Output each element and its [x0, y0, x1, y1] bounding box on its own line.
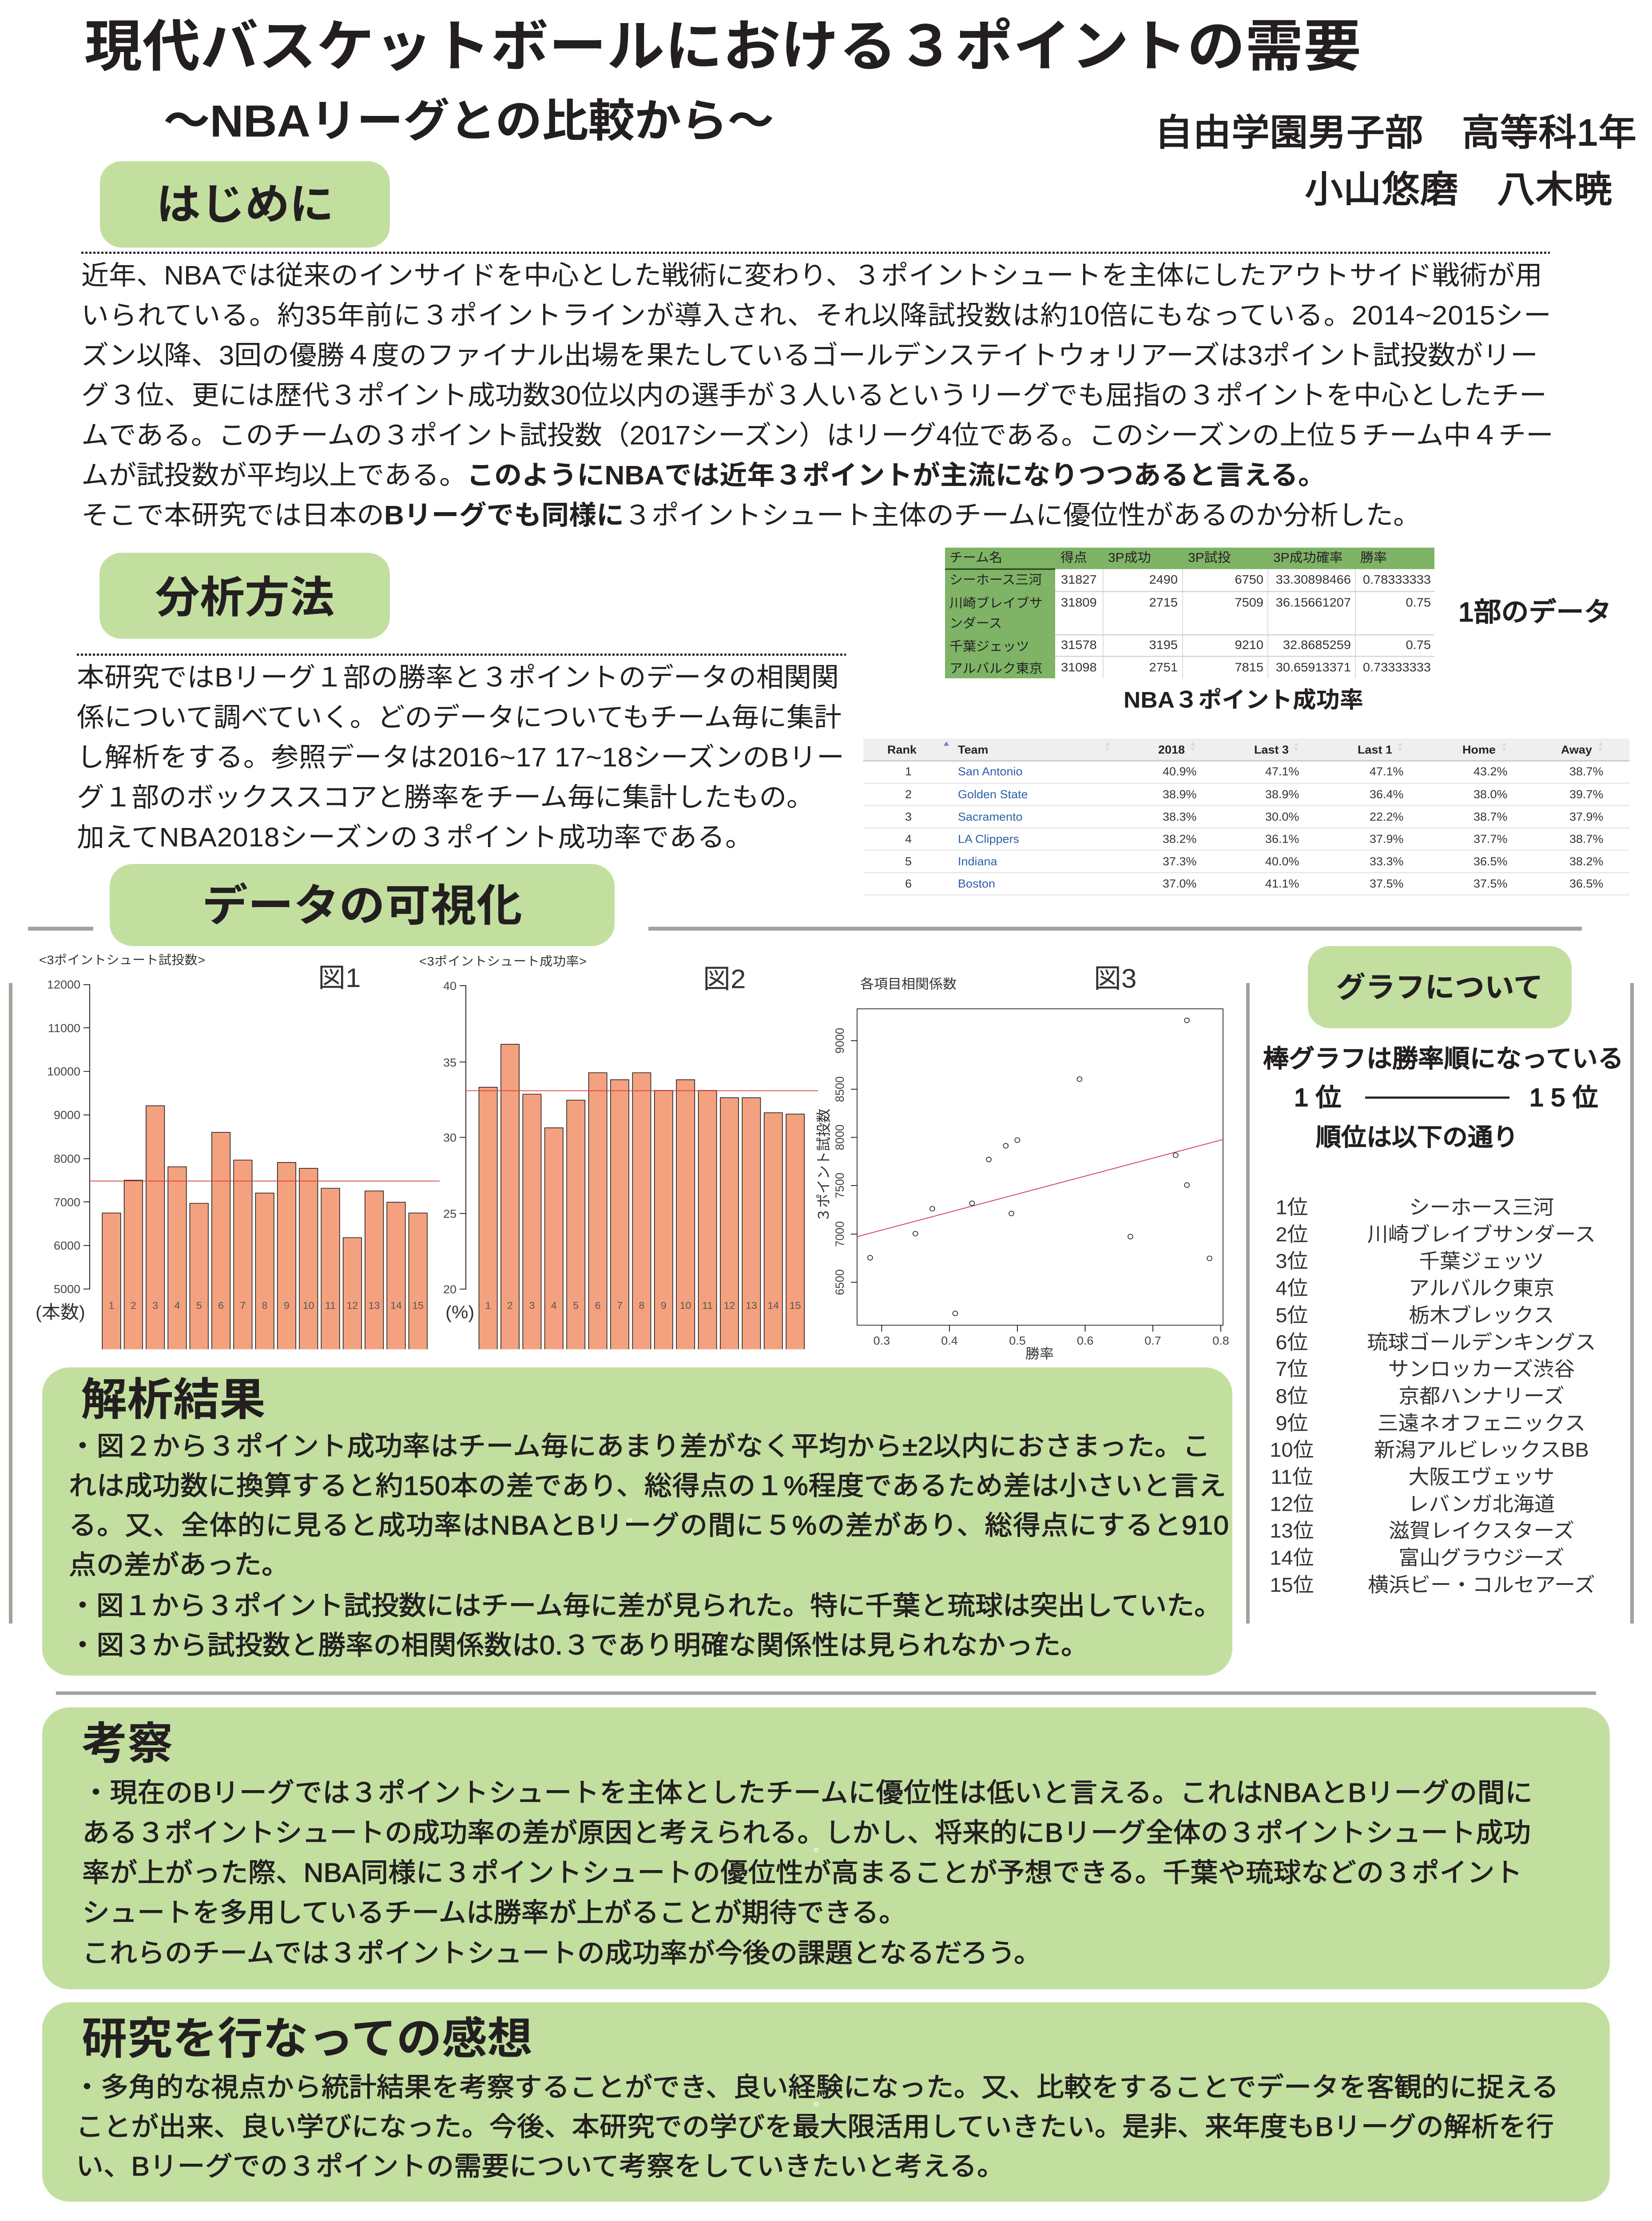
chart: figure 1 bar chart of 3-point attempts: 11 — [325, 1300, 336, 1311]
text block: reflections body: ことが出来、良い学びになった。今後、本研究での学びを最大限活用していきたい。是非、来年度もBリーグの解析を行 — [76, 2112, 1554, 2141]
text block: bar chart order note: 棒グラフは勝率順になっている — [1263, 1045, 1624, 1073]
text block: reflections body: ・多角的な視点から統計結果を考察することができ、良い経験になった。又、比較をすることでデータを客観的に捉える — [73, 2072, 1559, 2102]
text block: discussion body: シュートを多用しているチームは勝率が上がることが期待できる。 — [82, 1898, 906, 1927]
chart: figure 2 bar chart of 3-point percentage: 13 — [746, 1300, 757, 1311]
table: league division 1 data: チーム名 — [949, 550, 1002, 565]
chart: figure 2 bar chart of 3-point percentage: 7 — [617, 1300, 623, 1311]
panel: analysis method — [77, 553, 846, 852]
chart: figure 2 bar chart of 3-point percentage: (%) — [445, 1302, 474, 1322]
heading: reflections: 研究を行なっての感想 — [82, 2014, 532, 2063]
table: NBA 3-point percentage: 37.7% — [1473, 832, 1508, 846]
list: team ranking: 4位 — [1275, 1277, 1308, 1299]
table: league division 1 data: 7509 — [1235, 596, 1263, 609]
chart: figure 2 bar chart of 3-point percentage: 40 — [443, 979, 457, 992]
chart: figure 1 bar chart of 3-point attempts: 14 — [390, 1300, 402, 1311]
chart: figure 3 scatter plot of attempts against win rate: 0.8 — [1212, 1334, 1229, 1347]
table: NBA 3-point percentage: 36.5% — [1569, 877, 1604, 890]
heading: analysis results: 解析結果 — [81, 1374, 266, 1425]
chart: figure 1 bar chart of 3-point attempts: 5000 — [54, 1282, 80, 1296]
table: NBA 3-point percentage: 37.0% — [1163, 877, 1197, 890]
table: NBA 3-point percentage: 2018 — [1158, 743, 1185, 756]
table: NBA 3-point percentage: 41.1% — [1265, 877, 1299, 890]
chart: figure 3 scatter plot of attempts against win rate: 各項目相関係数 — [860, 977, 957, 992]
text block: reflections body — [73, 2072, 1559, 2181]
chart: figure 3 scatter plot of attempts against win rate: 6500 — [833, 1270, 846, 1295]
chart: figure 2 bar chart of 3-point percentage: 25 — [443, 1207, 457, 1220]
chart: figure 2 bar chart of 3-point percentage: <3ポイントシュート成功率> — [419, 955, 587, 968]
text block: bar chart order note: 順位は以下の通り — [1316, 1123, 1518, 1151]
table: NBA 3-point percentage: Last 1 — [1358, 743, 1392, 756]
table: NBA 3-point percentage: Away — [1561, 743, 1592, 756]
list: team ranking: サンロッカーズ渋谷 — [1388, 1357, 1575, 1380]
text block: discussion body: これらのチームでは３ポイントシュートの成功率が今後の課題となるだろう。 — [82, 1938, 1041, 1968]
label: NBA 3-point percentage: NBA３ポイント成功率 — [1124, 688, 1363, 713]
table: NBA 3-point percentage: 22.2% — [1370, 810, 1404, 823]
table: NBA 3-point percentage: 37.5% — [1370, 877, 1404, 890]
text block: introduction body: グ３位、更には歴代３ポイント成功数30位以内の選手が３人いるというリーグでも屈指の３ポイントを中心としたチー — [81, 380, 1547, 410]
text block: introduction body: このようにNBAでは近年３ポイントが主流になりつつあると言える。 — [467, 460, 1326, 490]
table: NBA 3-point percentage: 38.9% — [1265, 788, 1299, 801]
heading: data visualization — [110, 864, 615, 946]
list: team ranking: 富山グラウジーズ — [1398, 1546, 1565, 1569]
list: team ranking: 京都ハンナリーズ — [1398, 1385, 1565, 1407]
table: NBA 3-point percentage: 36.1% — [1265, 832, 1299, 846]
subtitle: 〜NBAリーグとの比較から〜 — [163, 96, 774, 146]
chart: figure 1 bar chart of 3-point attempts: 7000 — [54, 1196, 80, 1209]
chart: figure 1 bar chart of 3-point attempts: <3ポイントシュート試投数> — [39, 953, 205, 967]
chart: figure 3 scatter plot of attempts against win rate: 0.6 — [1077, 1334, 1093, 1347]
text block: introduction body: ムが試投数が平均以上である。 — [81, 460, 467, 490]
table: NBA 3-point percentage: 38.0% — [1473, 788, 1508, 801]
chart: figure 1 bar chart of 3-point attempts: 9 — [284, 1300, 290, 1311]
table: league division 1 data: 川崎ブレイブサ — [949, 596, 1043, 610]
list: team ranking: 2位 — [1275, 1223, 1308, 1246]
table: league division 1 data: 0.73333333 — [1363, 661, 1431, 674]
panel: introduction — [81, 161, 1553, 530]
text block: introduction body: Bリーグでも同様に — [384, 500, 624, 530]
table: league division 1 data: 得点 — [1060, 550, 1087, 565]
chart: figure 1 bar chart of 3-point attempts: 5 — [196, 1300, 202, 1311]
table: NBA 3-point percentage: Home — [1462, 743, 1496, 756]
list: team ranking: 8位 — [1275, 1385, 1308, 1407]
list: team ranking: 13位 — [1270, 1519, 1314, 1542]
table: NBA 3-point percentage: 38.7% — [1473, 810, 1508, 823]
heading: analysis method — [99, 553, 390, 639]
chart: figure 3 scatter plot of attempts against win rate: 9000 — [833, 1028, 846, 1054]
table: league division 1 data: 31578 — [1061, 638, 1097, 652]
chart: figure 3 scatter plot of attempts against win rate: 7000 — [833, 1221, 846, 1247]
chart: figure 1 bar chart of 3-point attempts: 12 — [347, 1300, 358, 1311]
text block: introduction body: ズン以降、3回の優勝４度のファイナル出場を果たしているゴールデンステイトウォリアーズは3ポイント試投数がリー — [81, 341, 1538, 370]
figure label 1: 図1 — [318, 963, 361, 993]
list: team ranking: 千葉ジェッツ — [1419, 1250, 1544, 1272]
text block: results body — [69, 1431, 1229, 1660]
table: league division 1 data: 30.65913371 — [1276, 661, 1351, 674]
panel: analysis results — [42, 1367, 1232, 1676]
chart: figure 2 bar chart of 3-point percentage: 9 — [661, 1300, 667, 1311]
table: NBA 3-point percentage: 43.2% — [1473, 765, 1508, 778]
chart: figure 2 bar chart of 3-point percentage: 20 — [443, 1283, 457, 1296]
table: NBA 3-point percentage: Rank — [887, 743, 917, 756]
panel: discussion — [42, 1708, 1610, 1989]
text block: results body: ・図３から試投数と勝率の相関係数は0.３であり明確な関係性は見られなかった。 — [69, 1631, 1088, 1660]
table: league division 1 data: ンダース — [949, 616, 1002, 631]
chart: figure 1 bar chart of 3-point attempts: 13 — [369, 1300, 380, 1311]
list: team ranking: 栃木ブレックス — [1409, 1304, 1554, 1326]
table: NBA 3-point percentage: Golden State — [958, 788, 1028, 801]
table: NBA 3-point percentage: 40.9% — [1163, 765, 1197, 778]
heading: data visualization: データの可視化 — [202, 881, 522, 930]
chart: figure 2 bar chart of 3-point percentage: 35 — [443, 1056, 457, 1069]
text block: method body: し解析をする。参照データは2016~17 17~18シーズンのBリー — [77, 742, 844, 772]
table: league division 1 data: 32.8685259 — [1283, 638, 1351, 652]
table: league division 1 data: 0.75 — [1406, 638, 1431, 652]
chart: figure 2 bar chart of 3-point percentage: 5 — [573, 1300, 579, 1311]
table: league division 1 data: 3P成功確率 — [1273, 550, 1343, 565]
table: league division 1 data: シーホース三河 — [949, 573, 1042, 587]
list: team ranking: 6位 — [1275, 1331, 1308, 1353]
table: league division 1 data: 勝率 — [1360, 550, 1387, 565]
figure label 3: 図3 — [1094, 964, 1136, 994]
chart: figure 1 bar chart of 3-point attempts: 10 — [303, 1300, 314, 1311]
chart: figure 2 bar chart of 3-point percentage: 1 — [485, 1300, 491, 1311]
chart: figure 2 bar chart of 3-point percentage: 3 — [529, 1300, 535, 1311]
table: league division 1 data: 33.30898466 — [1276, 573, 1351, 587]
table: NBA 3-point percentage: 38.2% — [1569, 855, 1604, 868]
list: team ranking: 7位 — [1275, 1357, 1308, 1380]
list: team ranking: 14位 — [1270, 1546, 1314, 1569]
chart: figure 1 bar chart of 3-point attempts: 8000 — [54, 1152, 80, 1165]
chart: figure 1 bar chart of 3-point attempts: 6 — [218, 1300, 224, 1311]
table: league division 1 data: 2751 — [1149, 661, 1178, 674]
text block: introduction body: ３ポイントシュート主体のチームに優位性があるのか分析した。 — [624, 500, 1421, 530]
table: league division 1 data: 3P試投 — [1188, 550, 1231, 565]
table: NBA 3-point percentage: 38.3% — [1163, 810, 1197, 823]
chart: figure 2 bar chart of 3-point percentage: 30 — [443, 1131, 457, 1144]
table: league division 1 data: 6750 — [1235, 573, 1263, 587]
table: NBA 3-point percentage: 38.7% — [1569, 832, 1604, 846]
text block: method body: グ１部のボックススコアと勝率をチーム毎に集計したもの。 — [77, 782, 814, 812]
list: team ranking: 11位 — [1271, 1465, 1313, 1488]
table: league division 1 data: 31827 — [1061, 573, 1097, 587]
chart: figure 1 bar chart of 3-point attempts: 8 — [262, 1300, 267, 1311]
chart: figure 1 bar chart of 3-point attempts: 4 — [175, 1300, 180, 1311]
list: team ranking: 5位 — [1275, 1304, 1308, 1326]
table: NBA 3-point percentage: 39.7% — [1569, 788, 1604, 801]
list: team ranking — [1270, 1196, 1596, 1596]
table: NBA 3-point percentage: 38.2% — [1163, 832, 1197, 846]
table: league division 1 data: 31809 — [1061, 596, 1097, 609]
table: NBA 3-point percentage: LA Clippers — [958, 832, 1019, 846]
text block: results body: ・図２から３ポイント成功率はチーム毎にあまり差がなく平均から±2以内におさまった。こ — [69, 1431, 1210, 1461]
figure label 2: 図2 — [703, 964, 746, 994]
chart: figure 2 bar chart of 3-point percentage: 14 — [768, 1300, 779, 1311]
chart: figure 1 bar chart of 3-point attempts: 9000 — [54, 1108, 80, 1122]
text block: reflections body: い、Bリーグでの３ポイントの需要について考察をしていきたいと考える。 — [76, 2151, 1005, 2181]
chart: figure 1 bar chart of 3-point attempts: 2 — [131, 1300, 136, 1311]
table: league division 1 data: 千葉ジェッツ — [949, 639, 1029, 654]
text block: discussion body — [82, 1778, 1533, 1968]
text block: introduction body: 近年、NBAでは従来のインサイドを中心とした戦術に変わり、３ポイントシュートを主体にしたアウトサイド戦術が用 — [81, 261, 1542, 290]
chart: figure 3 scatter plot of attempts against win rate: 0.7 — [1144, 1334, 1161, 1347]
list: team ranking: 12位 — [1270, 1493, 1314, 1515]
table: NBA 3-point percentage: 2 — [905, 788, 912, 801]
chart: figure 2 bar chart of 3-point percentage: 11 — [702, 1300, 713, 1311]
heading: introduction: はじめに — [156, 180, 334, 228]
table: NBA 3-point percentage: 6 — [905, 877, 912, 890]
table: NBA 3-point percentage: 36.5% — [1473, 855, 1508, 868]
list: team ranking: シーホース三河 — [1409, 1196, 1554, 1219]
chart: figure 2 bar chart of 3-point percentage — [419, 955, 818, 1349]
table: NBA 3-point percentage: 37.9% — [1569, 810, 1604, 823]
authors: 自由学園男子部 高等科1年 — [1155, 111, 1636, 153]
table: NBA 3-point percentage: Boston — [958, 877, 995, 890]
text block: introduction body: いられている。約35年前に３ポイントラインが導入され、それ以降試投数は約10倍にもなっている。2014~2015シー — [81, 301, 1551, 330]
text block: method body: 係について調べていく。どのデータについてもチーム毎に集計 — [77, 702, 842, 732]
text block: method body: 加えてNBA2018シーズンの３ポイント成功率である。 — [77, 822, 753, 852]
text block: method body — [77, 662, 844, 852]
list: team ranking: 川崎ブレイブサンダース — [1367, 1223, 1596, 1246]
chart: figure 2 bar chart of 3-point percentage: 15 — [790, 1300, 801, 1311]
table: NBA 3-point percentage: 4 — [905, 832, 912, 846]
table: NBA 3-point percentage — [863, 738, 1629, 895]
table: NBA 3-point percentage: 30.0% — [1265, 810, 1299, 823]
list: team ranking: 3位 — [1275, 1250, 1308, 1272]
list: team ranking: 大阪エヴェッサ — [1409, 1465, 1554, 1488]
list: team ranking: アルバルク東京 — [1409, 1277, 1554, 1299]
heading: about the graphs — [1308, 946, 1572, 1028]
table: league division 1 data: 2490 — [1149, 573, 1178, 587]
table: NBA 3-point percentage: 36.4% — [1370, 788, 1404, 801]
text block: discussion body: ・現在のBリーグでは３ポイントシュートを主体としたチームに優位性は低いと言える。これはNBAとBリーグの間に — [82, 1778, 1533, 1807]
table: NBA 3-point percentage: Sacramento — [958, 810, 1022, 823]
chart: figure 1 bar chart of 3-point attempts: 10000 — [47, 1065, 80, 1078]
table: league division 1 data: 7815 — [1235, 661, 1263, 674]
table: league division 1 data: アルバルク東京 — [949, 661, 1043, 676]
table: league division 1 data: 0.78333333 — [1363, 573, 1431, 587]
table: NBA 3-point percentage: Indiana — [958, 855, 997, 868]
table: league division 1 data: 0.75 — [1406, 596, 1431, 609]
text block: introduction body — [81, 261, 1553, 530]
list: team ranking: 15位 — [1270, 1573, 1314, 1596]
list: team ranking: 滋賀レイクスターズ — [1389, 1519, 1574, 1542]
text block: bar chart order note — [1263, 1045, 1624, 1151]
chart: figure 2 bar chart of 3-point percentage: 10 — [680, 1300, 691, 1311]
panel: reflections — [42, 2002, 1610, 2201]
text block: results body: る。又、全体的に見ると成功率はNBAとBリーグの間に５%の差があり、総得点にすると910 — [69, 1511, 1229, 1540]
list: team ranking: 10位 — [1270, 1438, 1314, 1461]
title: 現代バスケットボールにおける３ポイントの需要 — [84, 16, 1361, 78]
chart: figure 1 bar chart of 3-point attempts — [36, 953, 440, 1349]
table: NBA 3-point percentage: 38.7% — [1569, 765, 1604, 778]
label: division 1 data: 1部のデータ — [1458, 597, 1611, 627]
table: NBA 3-point percentage: 38.9% — [1163, 788, 1197, 801]
table: NBA 3-point percentage: 37.5% — [1473, 877, 1508, 890]
text block: discussion body: ある３ポイントシュートの成功率の差が原因と考えられる。しかし、将来的にBリーグ全体の３ポイントシュート成功 — [82, 1818, 1531, 1847]
chart: figure 3 scatter plot of attempts against win rate: 0.4 — [941, 1334, 958, 1347]
chart: figure 2 bar chart of 3-point percentage: 6 — [595, 1300, 600, 1311]
table: league division 1 data: 36.15661207 — [1276, 596, 1351, 609]
list: team ranking: 横浜ビー・コルセアーズ — [1368, 1573, 1595, 1596]
chart: figure 1 bar chart of 3-point attempts: 7 — [240, 1300, 246, 1311]
heading: introduction — [100, 161, 390, 247]
chart: figure 2 bar chart of 3-point percentage: 2 — [507, 1300, 513, 1311]
list: team ranking: 三遠ネオフェニックス — [1378, 1412, 1585, 1434]
chart: figure 2 bar chart of 3-point percentage: 12 — [724, 1300, 735, 1311]
chart: figure 3 scatter plot of attempts against win rate: 8000 — [833, 1124, 846, 1150]
table: NBA 3-point percentage: 47.1% — [1265, 765, 1299, 778]
authors — [1155, 111, 1636, 210]
panel: about the graphs — [1263, 946, 1624, 1596]
text block: bar chart order note: 1 5 位 — [1529, 1084, 1598, 1112]
text block: results body: 点の差があった。 — [69, 1550, 289, 1580]
chart: figure 1 bar chart of 3-point attempts: 6000 — [54, 1239, 80, 1252]
table: league division 1 data — [945, 548, 1434, 678]
table: NBA 3-point percentage: 37.3% — [1163, 855, 1197, 868]
table: NBA 3-point percentage: 40.0% — [1265, 855, 1299, 868]
chart: figure 3 scatter plot of attempts against win rate: 8500 — [833, 1076, 846, 1102]
table: league division 1 data: 3P成功 — [1108, 550, 1151, 565]
heading: about the graphs: グラフについて — [1336, 971, 1543, 1003]
table: league division 1 data: 2715 — [1149, 596, 1178, 609]
chart: figure 3 scatter plot of attempts against win rate: 0.5 — [1009, 1334, 1026, 1347]
chart: figure 3 scatter plot of attempts against win rate: ３ポイント試投数 — [816, 1109, 832, 1222]
text block: discussion body: 率が上がった際、NBA同様に３ポイントシュートの優位性が高まることが予想できる。千葉や琉球などの３ポイント — [82, 1858, 1522, 1887]
text block: results body: ・図１から３ポイント試投数にはチーム毎に差が見られた。特に千葉と琉球は突出していた。 — [69, 1591, 1222, 1620]
icon: sort arrows — [944, 741, 1603, 752]
chart: figure 1 bar chart of 3-point attempts: 15 — [412, 1300, 424, 1311]
list: team ranking: 1位 — [1275, 1196, 1308, 1219]
heading: discussion: 考察 — [82, 1719, 173, 1768]
table: NBA 3-point percentage: 1 — [905, 765, 912, 778]
list: team ranking: 琉球ゴールデンキングス — [1367, 1331, 1596, 1353]
chart: figure 1 bar chart of 3-point attempts: 12000 — [47, 978, 80, 991]
table: NBA 3-point percentage: 47.1% — [1370, 765, 1404, 778]
text block: method body: 本研究ではBリーグ１部の勝率と３ポイントのデータの相関関 — [77, 662, 839, 692]
chart: figure 3 scatter plot of attempts against win rate: 7500 — [833, 1173, 846, 1198]
chart: figure 2 bar chart of 3-point percentage: 4 — [551, 1300, 557, 1311]
table: NBA 3-point percentage: Last 3 — [1254, 743, 1289, 756]
chart: figure 3 scatter plot of attempts against win rate — [816, 964, 1229, 1361]
authors: 小山悠磨 八木暁 — [1305, 168, 1612, 210]
table: NBA 3-point percentage: 3 — [905, 810, 912, 823]
chart: figure 2 bar chart of 3-point percentage: 8 — [639, 1300, 644, 1311]
table: NBA 3-point percentage: 33.3% — [1370, 855, 1404, 868]
table: league division 1 data: 9210 — [1235, 638, 1263, 652]
table: NBA 3-point percentage: Team — [958, 743, 988, 756]
table: league division 1 data: 31098 — [1061, 661, 1097, 674]
chart: figure 3 scatter plot of attempts against win rate: 0.3 — [874, 1334, 890, 1347]
text block: bar chart order note: 1 位 — [1294, 1084, 1341, 1112]
table: NBA 3-point percentage: 5 — [905, 855, 912, 868]
chart: figure 3 scatter plot of attempts against win rate: 勝率 — [1025, 1346, 1054, 1361]
table: NBA 3-point percentage: 37.9% — [1370, 832, 1404, 846]
chart: figure 1 bar chart of 3-point attempts: 1 — [109, 1300, 114, 1311]
heading: analysis method: 分析方法 — [155, 573, 334, 622]
table: league division 1 data: 3195 — [1149, 638, 1178, 652]
table: NBA 3-point percentage: San Antonio — [958, 765, 1023, 778]
chart: figure 1 bar chart of 3-point attempts: 11000 — [48, 1022, 80, 1035]
text block: results body: れは成功数に換算すると約150本の差であり、総得点の１%程度であるため差は小さいと言え — [69, 1471, 1226, 1501]
text block: introduction body: そこで本研究では日本の — [81, 500, 384, 530]
chart: figure 1 bar chart of 3-point attempts: 3 — [152, 1300, 158, 1311]
list: team ranking: 9位 — [1275, 1412, 1308, 1434]
text block: introduction body: ムである。このチームの３ポイント試投数（2017シーズン）はリーグ4位である。このシーズンの上位５チーム中４チー — [81, 420, 1553, 450]
chart: figure 1 bar chart of 3-point attempts: (本数) — [36, 1302, 85, 1322]
list: team ranking: レバンガ北海道 — [1408, 1493, 1555, 1515]
list: team ranking: 新潟アルビレックスBB — [1374, 1438, 1589, 1461]
